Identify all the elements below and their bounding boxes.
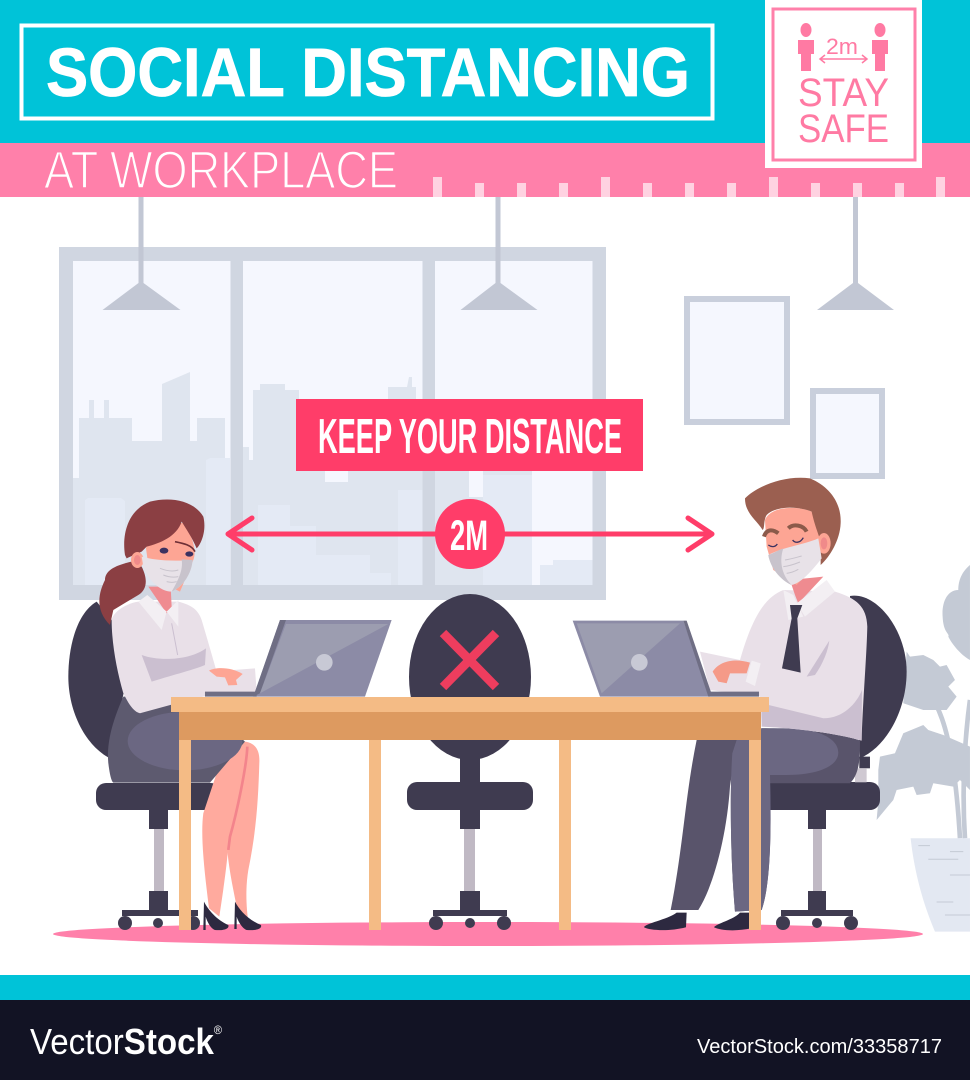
tie xyxy=(782,605,802,673)
skirt xyxy=(108,693,245,783)
chair back xyxy=(68,602,133,758)
window xyxy=(59,247,606,600)
floor xyxy=(53,922,923,946)
icon: right person xyxy=(872,23,888,71)
banner: KEEP YOUR DISTANCE xyxy=(318,410,622,464)
neck xyxy=(148,587,172,613)
hand xyxy=(713,660,750,683)
shirt fold xyxy=(142,648,206,682)
ruler ticks xyxy=(433,177,945,197)
stay safe sign xyxy=(765,0,922,168)
face xyxy=(765,508,822,585)
chair back xyxy=(850,596,907,782)
mask xyxy=(142,557,193,592)
collar xyxy=(138,595,178,655)
stay safe text: STAY xyxy=(798,71,889,115)
watermark logo: ® xyxy=(214,1023,222,1037)
shoes xyxy=(203,902,261,930)
distance arrow: 2M xyxy=(450,512,488,560)
trousers xyxy=(671,728,860,912)
legs xyxy=(202,742,259,922)
shirt xyxy=(112,602,257,713)
frame large xyxy=(687,299,787,422)
frame small xyxy=(813,391,882,476)
stay safe text xyxy=(798,71,889,151)
icon: left person xyxy=(798,23,814,71)
plant xyxy=(877,565,970,932)
banner xyxy=(296,399,643,471)
eyes and brows xyxy=(764,525,807,547)
laptop xyxy=(573,621,759,697)
footer band xyxy=(0,975,970,1000)
laptop xyxy=(205,620,392,697)
hair xyxy=(745,478,841,565)
face xyxy=(146,523,195,592)
eyes xyxy=(160,542,195,557)
cuff xyxy=(746,661,761,686)
hair xyxy=(124,500,204,558)
subtitle: AT WORKPLACE xyxy=(44,141,398,200)
neck xyxy=(790,577,823,603)
watermark logo: VectorStock xyxy=(30,1021,222,1062)
woman chair seat xyxy=(96,783,221,930)
2m label: 2m xyxy=(826,34,858,59)
icon: red cross xyxy=(443,633,496,687)
ear xyxy=(817,533,831,554)
center chair xyxy=(407,594,533,930)
collar xyxy=(783,580,835,620)
shirt xyxy=(700,590,867,741)
header band xyxy=(0,0,970,197)
city skyline xyxy=(73,372,532,585)
footer xyxy=(0,1000,970,1080)
shirt shade xyxy=(762,641,862,741)
lamps xyxy=(102,197,894,310)
ponytail xyxy=(99,562,146,625)
man chair seat xyxy=(760,782,880,930)
icon: double arrow xyxy=(820,55,867,63)
ear xyxy=(131,552,144,568)
title: SOCIAL DISTANCING xyxy=(46,34,690,111)
woman xyxy=(68,500,392,930)
hand xyxy=(209,668,243,685)
watermark url: VectorStock.com/33358717 xyxy=(697,1036,942,1058)
shoes xyxy=(644,913,752,930)
stay safe text: SAFE xyxy=(798,107,889,151)
man xyxy=(573,478,907,930)
table xyxy=(171,697,769,930)
mask xyxy=(768,538,822,585)
distance arrow xyxy=(228,499,712,569)
